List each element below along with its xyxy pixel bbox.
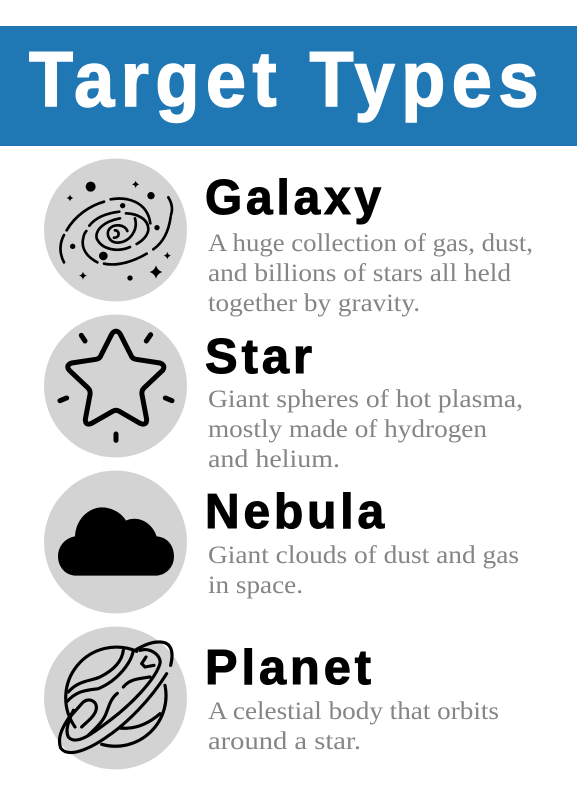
panel: planet xyxy=(44,626,499,770)
description: planet: around a star. xyxy=(208,728,361,755)
description: star: mostly made of hydrogen xyxy=(208,416,488,443)
description: star: and helium. xyxy=(208,446,340,473)
description: galaxy: A huge collection of gas, dust, xyxy=(208,230,533,257)
description: galaxy: together by gravity. xyxy=(208,290,420,317)
description: star: Giant spheres of hot plasma, xyxy=(208,386,523,413)
icon: cloud xyxy=(44,470,187,614)
panel: star xyxy=(44,314,523,473)
heading: Star: Star xyxy=(205,330,316,384)
title banner xyxy=(0,26,577,146)
heading: Planet: Planet xyxy=(205,641,375,695)
icon: galaxy xyxy=(44,158,187,302)
panel: nebula xyxy=(44,470,519,614)
description: nebula: Giant clouds of dust and gas xyxy=(208,542,519,569)
title: Target Types xyxy=(29,35,545,123)
icon: planet xyxy=(44,626,187,770)
description: nebula: in space. xyxy=(208,572,303,599)
heading: Nebula: Nebula xyxy=(205,485,388,539)
description: galaxy: and billions of stars all held xyxy=(208,260,512,287)
panel: galaxy xyxy=(44,158,533,317)
icon: star xyxy=(44,314,187,458)
description: planet: A celestial body that orbits xyxy=(208,698,499,725)
heading: Galaxy: Galaxy xyxy=(205,171,385,225)
